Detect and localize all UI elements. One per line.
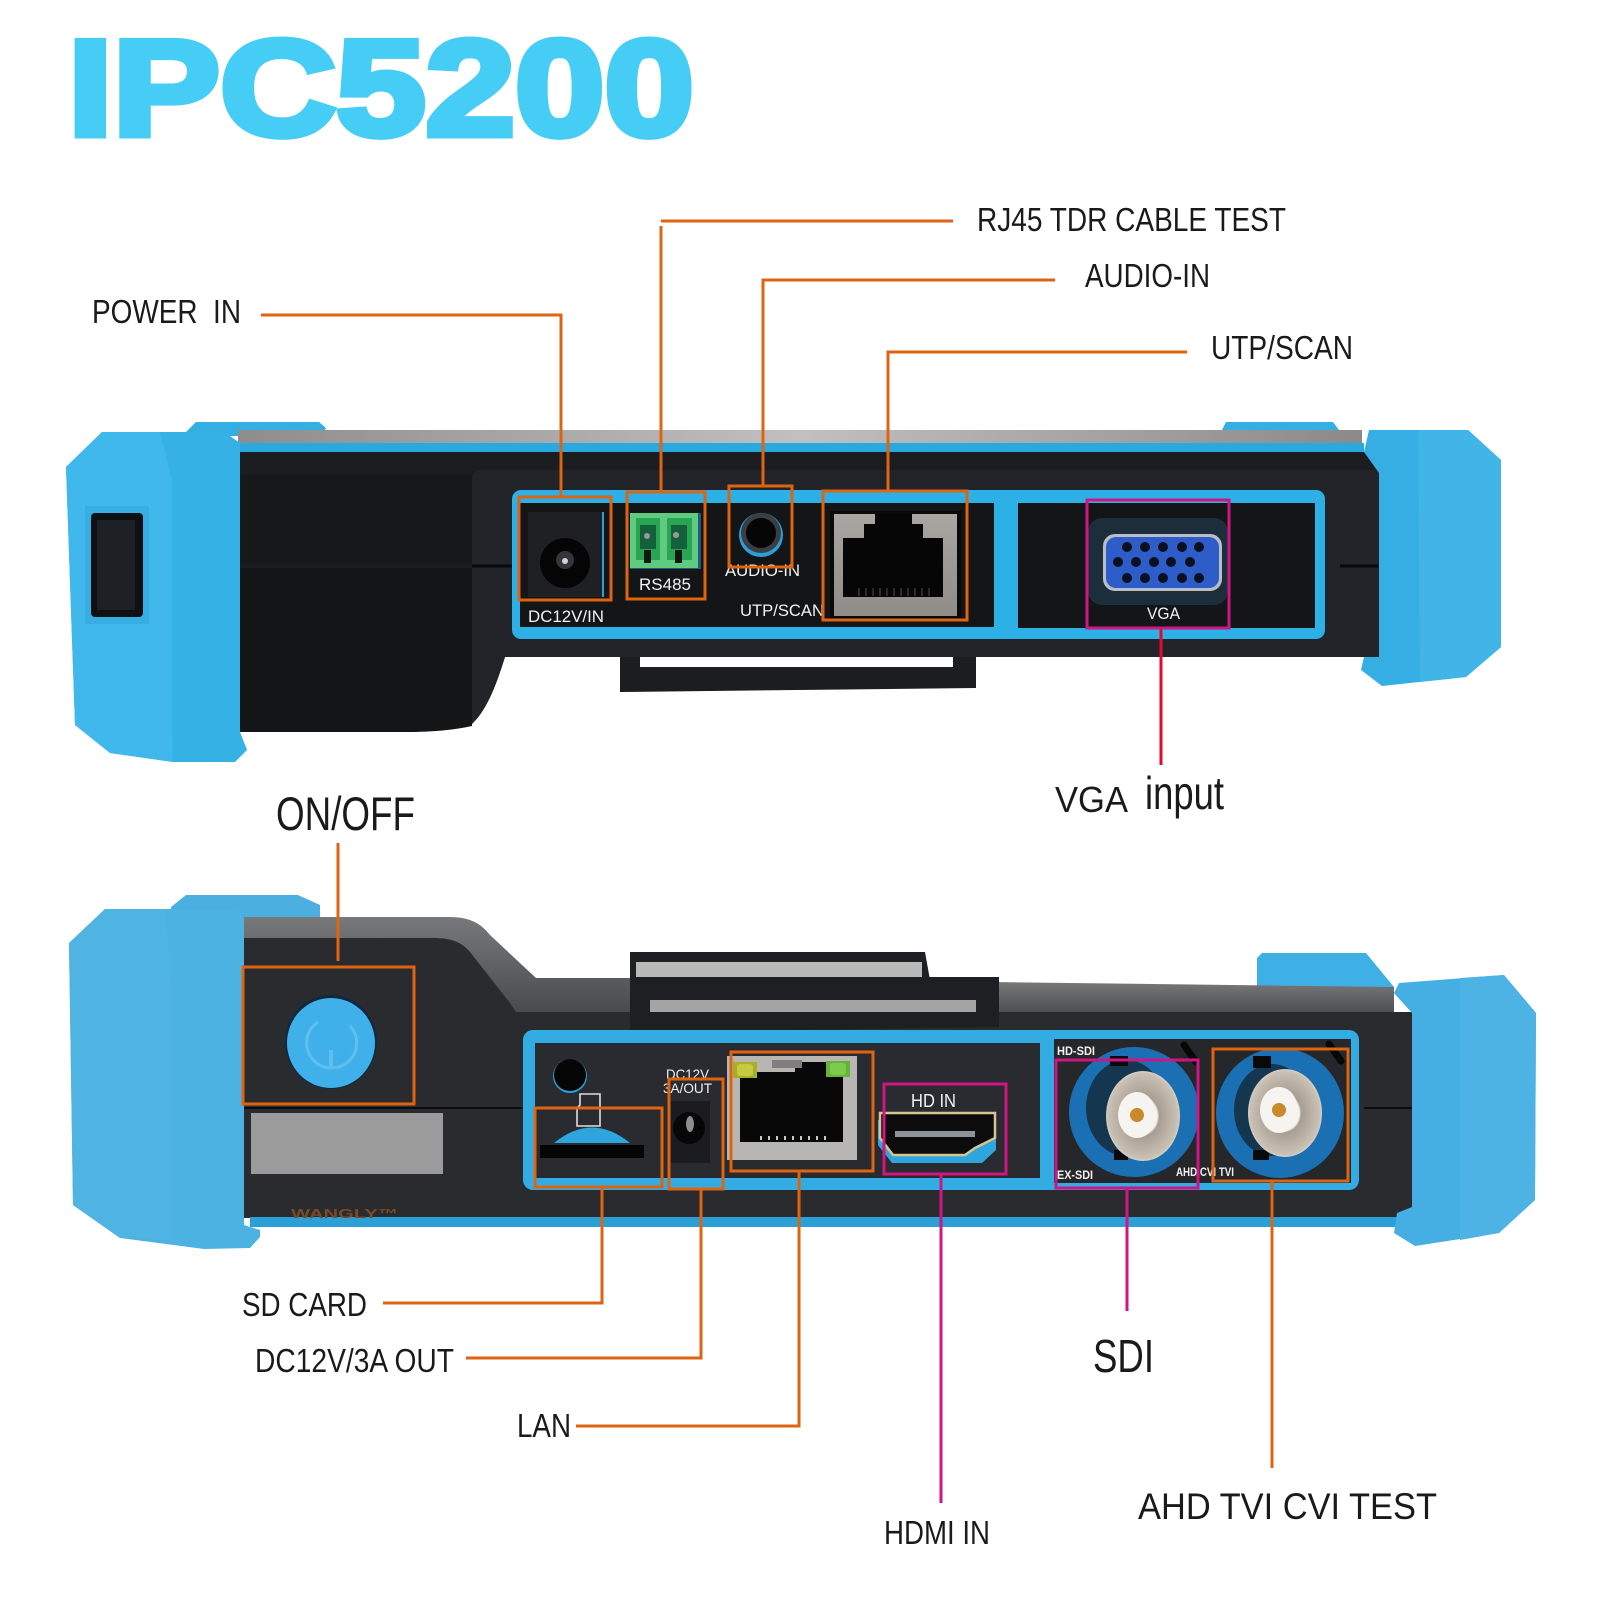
bottom blue strip xyxy=(250,1217,1400,1227)
callout: SD card: SD CARD xyxy=(242,1286,367,1323)
RS485 label: RS485 xyxy=(639,575,691,594)
top gray strip xyxy=(238,430,1362,444)
inner panel right xyxy=(1018,503,1315,628)
RJ45 port xyxy=(830,511,961,619)
left dark block xyxy=(236,474,472,565)
main body xyxy=(238,452,1379,732)
callout: SD card xyxy=(242,1108,662,1323)
gray label xyxy=(251,1113,443,1174)
DC jack xyxy=(528,512,604,597)
BNC right xyxy=(1216,1048,1344,1178)
left bumper xyxy=(69,909,260,1249)
audio label: AUDIO-IN xyxy=(725,561,800,580)
right bumper xyxy=(1361,430,1501,686)
inner panel left xyxy=(535,1043,1040,1178)
blue port panel xyxy=(523,1030,1359,1190)
RS485 connector xyxy=(630,513,701,569)
right clip xyxy=(1257,953,1394,995)
BNC labels: EX-SDI xyxy=(1057,1168,1093,1182)
callout: on off xyxy=(243,787,415,1104)
callout: LAN: LAN xyxy=(517,1407,571,1444)
callout: power in: POWER IN xyxy=(92,293,241,330)
callout: audio in: AUDIO-IN xyxy=(1085,257,1210,294)
callout: VGA input xyxy=(1055,500,1229,820)
BNC labels: AHD CVI TVI xyxy=(1176,1165,1234,1179)
BNC left xyxy=(1069,1047,1199,1177)
power button xyxy=(285,995,377,1089)
HDMI port xyxy=(878,1113,996,1163)
callout: UTP scan xyxy=(823,329,1353,620)
callout: SDI: SDI xyxy=(1093,1330,1154,1382)
right bumper xyxy=(1394,975,1536,1246)
DC12V label: DC12V/IN xyxy=(528,607,604,626)
BNC labels: HD-SDI xyxy=(1057,1044,1095,1058)
callout: DC out xyxy=(255,1079,723,1379)
VGA label: VGA xyxy=(1147,604,1181,623)
panel slots xyxy=(1184,1044,1341,1062)
side seam xyxy=(240,1107,1412,1109)
front stand xyxy=(630,977,999,1032)
stand handle xyxy=(620,642,976,692)
SD slot xyxy=(540,1128,644,1158)
callout: RJ45 TDR xyxy=(627,201,1286,599)
HD IN label: HD IN xyxy=(911,1091,956,1111)
micro SD icon xyxy=(577,1094,600,1126)
left bumper slot xyxy=(85,506,149,624)
audio jack xyxy=(739,513,783,557)
blue port panel xyxy=(512,490,1325,639)
DC out label: 3A/OUT xyxy=(663,1080,712,1096)
callout: VGA input: VGA xyxy=(1055,779,1128,820)
back gray shell xyxy=(240,917,640,1012)
DC out jack xyxy=(668,1101,710,1163)
LAN port xyxy=(727,1056,857,1160)
callout: audio in xyxy=(729,257,1210,567)
left clip xyxy=(186,422,326,436)
callout: UTP scan: UTP/SCAN xyxy=(1211,329,1353,366)
VGA port xyxy=(1088,518,1228,605)
callout: DC out: DC12V/3A OUT xyxy=(255,1342,454,1379)
DC out label xyxy=(663,1066,712,1096)
main body xyxy=(240,938,1412,1218)
blue top strip xyxy=(238,443,1364,452)
round hole xyxy=(553,1059,587,1093)
callout: HDMI in: HDMI IN xyxy=(884,1514,990,1551)
BNC labels xyxy=(1057,1044,1234,1182)
callout: RJ45 TDR: RJ45 TDR CABLE TEST xyxy=(977,201,1286,238)
right clip xyxy=(1221,422,1350,445)
callout: on off: ON/OFF xyxy=(276,787,415,840)
DC out label: DC12V xyxy=(666,1066,710,1082)
callout: AHD TVI CVI test xyxy=(1138,1049,1437,1527)
callout: AHD TVI CVI test: AHD TVI CVI TEST xyxy=(1138,1486,1437,1527)
callout: HDMI in xyxy=(884,1084,1006,1551)
lower left block xyxy=(236,568,472,732)
inner panel left xyxy=(520,503,994,627)
title: IPC5200 xyxy=(68,12,694,164)
callout: VGA input: input xyxy=(1145,767,1224,819)
device: top view xyxy=(66,422,1501,762)
chevron body step xyxy=(472,470,1379,724)
device: bottom view xyxy=(69,895,1536,1249)
UTP label: UTP/SCAN xyxy=(740,601,824,620)
callout: SDI xyxy=(1056,1060,1198,1382)
inner panel right xyxy=(1054,1039,1351,1183)
left bumper xyxy=(66,432,247,762)
brand mark: WANGLY™ xyxy=(291,1206,398,1221)
callout: LAN xyxy=(517,1052,873,1444)
left clip xyxy=(171,895,320,925)
side seam xyxy=(472,564,1379,568)
callout: power in xyxy=(92,293,611,600)
back stand xyxy=(630,952,930,980)
